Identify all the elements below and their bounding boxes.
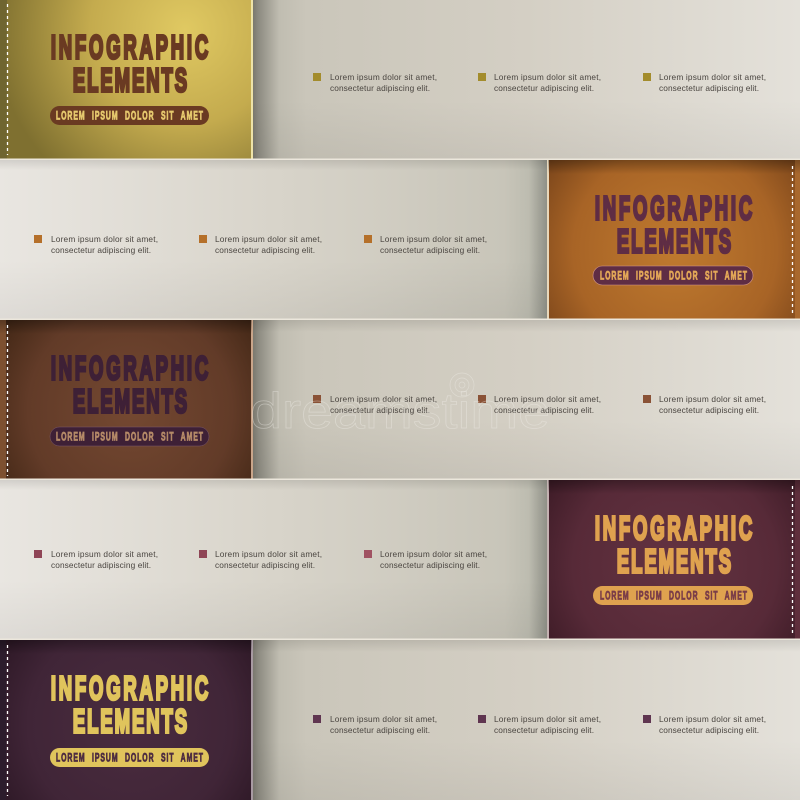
panel: brown label: [0, 320, 800, 480]
list items row 4: Lorem ipsum dolor sit amet,: [380, 549, 487, 559]
pill: brown label: [50, 427, 209, 446]
row 2: orange label and text strip: [0, 160, 800, 320]
pill: brown label: LOREM IPSUM DOLOR SIT AMET: [56, 431, 203, 444]
list items row 5: consectetur adipiscing elit.: [494, 725, 594, 735]
list items row 2: [34, 234, 487, 255]
panel: paper strip 3: [252, 320, 800, 480]
row 4: maroon label and text strip: [0, 480, 800, 640]
heading: gold label: [51, 29, 208, 99]
heading: gold label: ELEMENTS: [73, 62, 187, 99]
list items row 5: Lorem ipsum dolor sit amet,: [494, 714, 601, 724]
panel: paper strip 5: [252, 640, 800, 800]
heading: brown label: [51, 350, 208, 420]
row 1: gold label and text strip: [0, 0, 800, 160]
list items row 1: consectetur adipiscing elit.: [330, 83, 430, 93]
list items row 3: Lorem ipsum dolor sit amet,: [494, 394, 601, 404]
heading: maroon label: INFOGRAPHIC: [595, 510, 752, 547]
heading: orange label: ELEMENTS: [617, 223, 731, 260]
pill: gold label: LOREM IPSUM DOLOR SIT AMET: [56, 110, 203, 123]
pill: plum label: LOREM IPSUM DOLOR SIT AMET: [56, 752, 203, 765]
list items row 4: consectetur adipiscing elit.: [51, 560, 151, 570]
list items row 2: Lorem ipsum dolor sit amet,: [380, 234, 487, 244]
panel: plum label: [0, 640, 253, 800]
list items row 5: consectetur adipiscing elit.: [659, 725, 759, 735]
list items row 5: consectetur adipiscing elit.: [330, 725, 430, 735]
pill: maroon label: [593, 586, 753, 605]
list items row 3: consectetur adipiscing elit.: [659, 405, 759, 415]
heading: gold label: INFOGRAPHIC: [51, 29, 208, 66]
heading: brown label: ELEMENTS: [73, 383, 187, 420]
pill: plum label: [50, 748, 209, 767]
panel: paper strip 4: [0, 480, 548, 640]
list items row 2: consectetur adipiscing elit.: [51, 245, 151, 255]
heading: maroon label: ELEMENTS: [617, 543, 731, 580]
list items row 3: consectetur adipiscing elit.: [494, 405, 594, 415]
list items row 2: Lorem ipsum dolor sit amet,: [51, 234, 158, 244]
panel: gold label: [0, 0, 800, 160]
heading: plum label: ELEMENTS: [73, 703, 187, 740]
watermark: dreamstime: [250, 383, 550, 439]
panel: orange label: [0, 160, 800, 320]
panel: paper strip 2: [0, 160, 548, 320]
list items row 4: [34, 549, 487, 570]
list items row 2: consectetur adipiscing elit.: [380, 245, 480, 255]
list items row 4: consectetur adipiscing elit.: [215, 560, 315, 570]
list items row 3: [313, 394, 766, 415]
list items row 1: [313, 72, 766, 93]
list items row 4: consectetur adipiscing elit.: [380, 560, 480, 570]
list items row 1: consectetur adipiscing elit.: [494, 83, 594, 93]
pill: orange label: LOREM IPSUM DOLOR SIT AMET: [600, 270, 747, 283]
list items row 3: consectetur adipiscing elit.: [330, 405, 430, 415]
list items row 2: Lorem ipsum dolor sit amet,: [215, 234, 322, 244]
list items row 1: Lorem ipsum dolor sit amet,: [330, 72, 437, 82]
panel: paper strip 1: [252, 0, 800, 160]
pill: orange label: [593, 266, 753, 285]
panel: maroon label: [0, 480, 800, 640]
heading: brown label: INFOGRAPHIC: [51, 350, 208, 387]
heading: maroon label: [595, 510, 752, 580]
list items row 1: Lorem ipsum dolor sit amet,: [494, 72, 601, 82]
row 3: brown label and text strip: [0, 320, 800, 480]
list items row 5: [313, 714, 766, 735]
list items row 1: Lorem ipsum dolor sit amet,: [659, 72, 766, 82]
list items row 5: Lorem ipsum dolor sit amet,: [330, 714, 437, 724]
heading: plum label: [51, 670, 208, 740]
list items row 3: Lorem ipsum dolor sit amet,: [659, 394, 766, 404]
list items row 2: consectetur adipiscing elit.: [215, 245, 315, 255]
heading: orange label: [595, 190, 752, 260]
list items row 3: Lorem ipsum dolor sit amet,: [330, 394, 437, 404]
list items row 4: Lorem ipsum dolor sit amet,: [215, 549, 322, 559]
row 5: plum label and text strip: [0, 640, 800, 800]
list items row 4: Lorem ipsum dolor sit amet,: [51, 549, 158, 559]
list items row 5: Lorem ipsum dolor sit amet,: [659, 714, 766, 724]
heading: orange label: INFOGRAPHIC: [595, 190, 752, 227]
pill: gold label: [50, 106, 209, 125]
pill: maroon label: LOREM IPSUM DOLOR SIT AMET: [600, 590, 747, 603]
heading: plum label: INFOGRAPHIC: [51, 670, 208, 707]
list items row 1: consectetur adipiscing elit.: [659, 83, 759, 93]
